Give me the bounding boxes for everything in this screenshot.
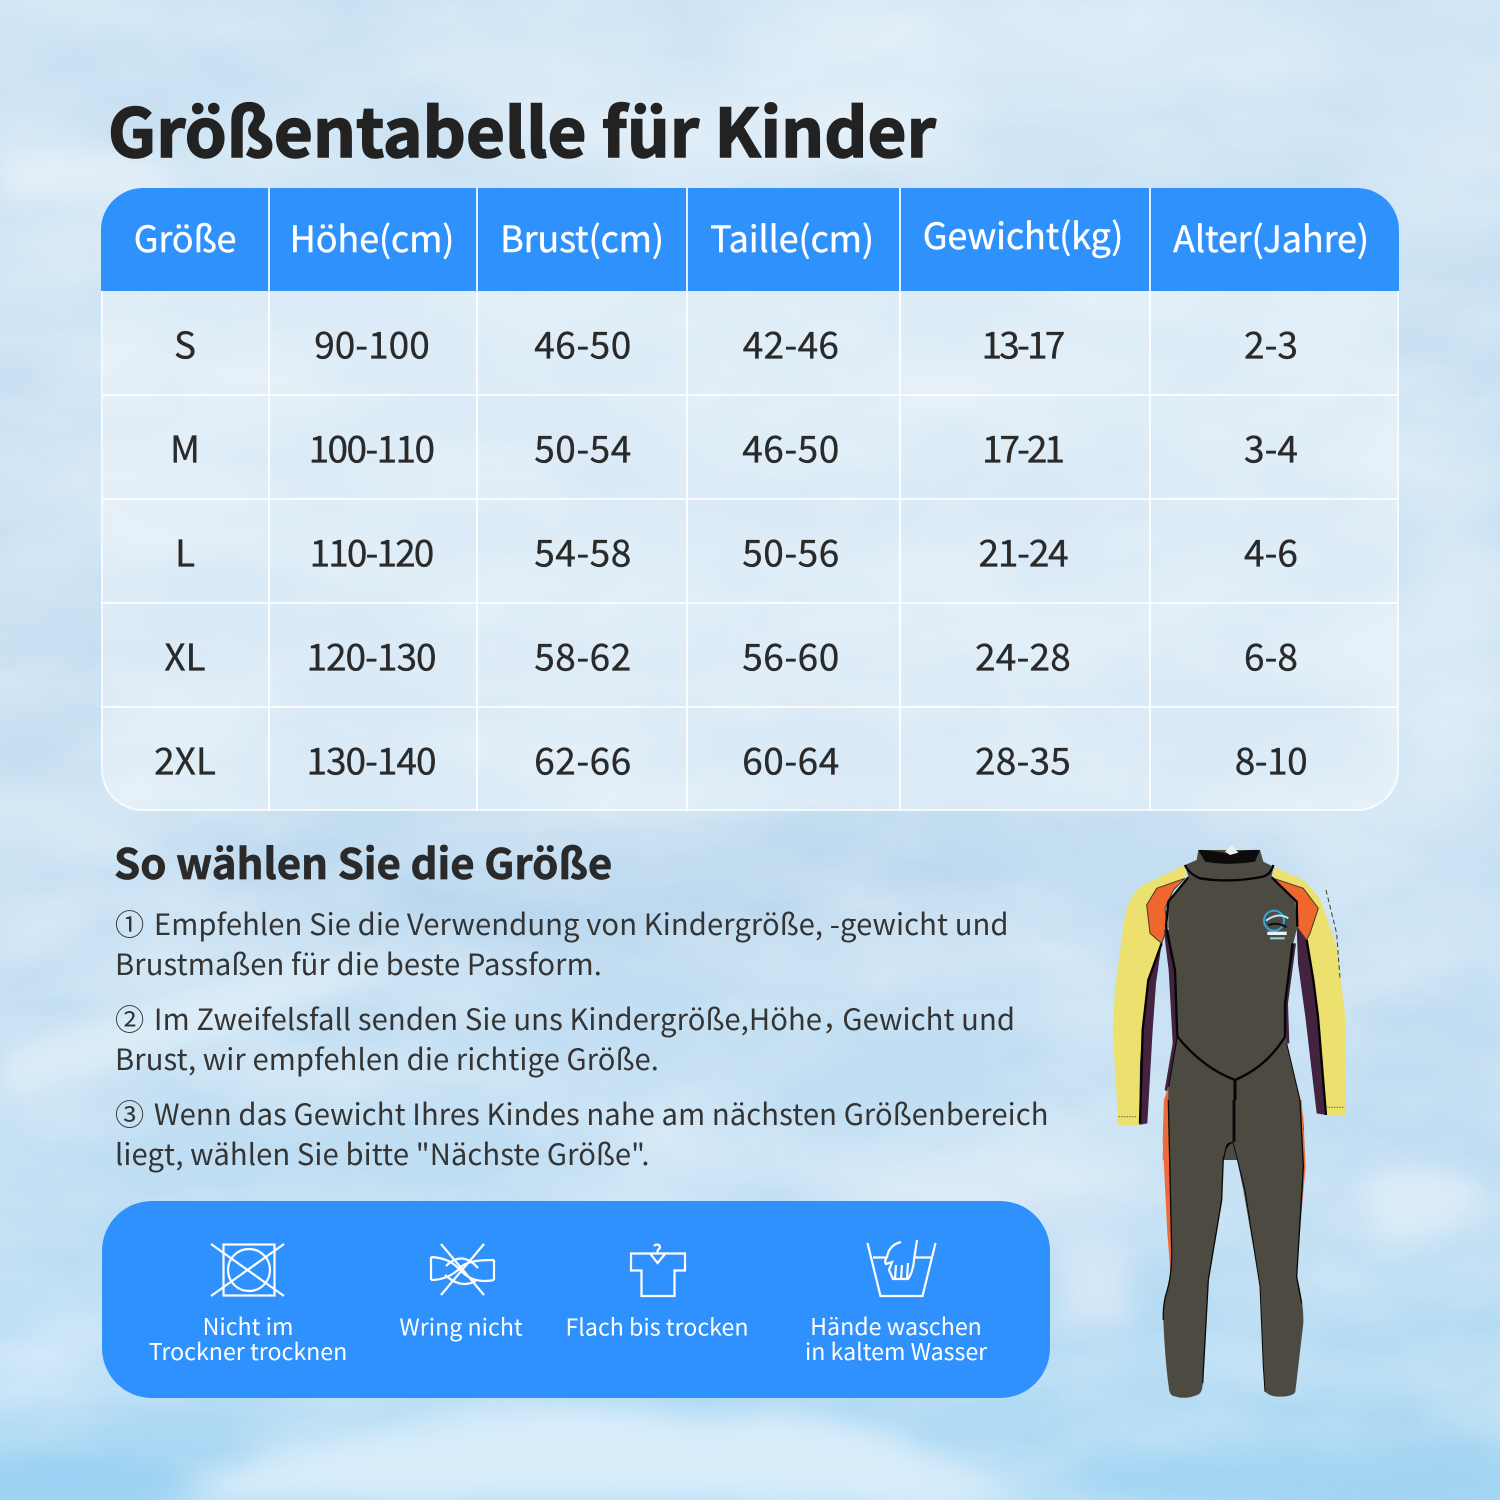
- row XL: 58-62: [534, 628, 632, 682]
- row M: 50-54: [534, 420, 632, 474]
- row L: [175, 524, 1298, 578]
- wetsuit illustration: [1112, 845, 1346, 1398]
- yellow left sleeve: [1113, 865, 1185, 1125]
- legs: [1163, 1100, 1304, 1398]
- collar inside: [1198, 850, 1260, 864]
- label: hand wash cold: Hände waschen: [810, 1308, 982, 1342]
- label: hand wash cold: [805, 1308, 988, 1367]
- table header row: [101, 188, 1399, 291]
- tip 1: Brustmaßen für die beste Passform.: [115, 942, 602, 984]
- table header row: Größe: [134, 211, 236, 263]
- tip 2: Brust, wir empfehlen die richtige Größe.: [115, 1037, 659, 1079]
- tip 1: [115, 902, 1009, 984]
- label: do not tumble dry: Nicht im: [203, 1308, 293, 1342]
- icon: hand wash tub: [866, 1240, 936, 1298]
- yellow right sleeve: [1273, 867, 1346, 1115]
- table header row: Brust(cm): [500, 211, 664, 263]
- row L: 54-58: [534, 524, 632, 578]
- suit upper: sleeves, torso, seams: [1113, 845, 1346, 1160]
- row 2XL: 62-66: [534, 732, 632, 786]
- label: do not tumble dry: Trockner trocknen: [149, 1333, 347, 1367]
- row S: 46-50: [534, 316, 632, 370]
- row M: 100-110: [309, 420, 433, 474]
- label: dry flat: Flach bis trocken: [566, 1308, 748, 1342]
- row S: S: [174, 316, 196, 370]
- orange shoulder panels: [1147, 878, 1318, 943]
- sleeve purple panels: [1138, 927, 1326, 1125]
- seams: [1140, 865, 1326, 1160]
- row XL: 24-28: [975, 628, 1071, 682]
- heading: how to choose size: So wählen Sie die Größe: [114, 831, 612, 892]
- label: do not tumble dry: [149, 1308, 347, 1367]
- table header row: Höhe(cm): [290, 211, 454, 263]
- row M: 46-50: [742, 420, 840, 474]
- icon: do not wring: [430, 1243, 496, 1296]
- torso side stripes: [1163, 930, 1305, 1160]
- row M: [170, 420, 1298, 474]
- row L: 21-24: [979, 524, 1067, 578]
- row 2XL: 28-35: [975, 732, 1071, 786]
- table header row: Taille(cm): [710, 211, 874, 263]
- row L: 110-120: [310, 524, 432, 578]
- row M: 17-21: [982, 420, 1062, 474]
- row S: 13-17: [982, 316, 1062, 370]
- row M: M: [170, 420, 200, 474]
- row XL: 120-130: [306, 628, 436, 682]
- row L: L: [175, 524, 195, 578]
- label: hand wash cold: in kaltem Wasser: [805, 1333, 987, 1367]
- torso body: [1167, 850, 1303, 1160]
- row L: 4-6: [1244, 524, 1298, 578]
- row S: 2-3: [1244, 316, 1298, 370]
- row XL: 6-8: [1244, 628, 1298, 682]
- cuff and sleeve stitching: [1118, 890, 1345, 1117]
- row XL: [164, 628, 1298, 682]
- row M: 3-4: [1244, 420, 1298, 474]
- row 2XL: 8-10: [1235, 732, 1307, 786]
- icon: do not tumble dry: [210, 1243, 285, 1297]
- row 2XL: [154, 732, 1307, 786]
- size table: [101, 188, 1399, 811]
- tip 2: ② Im Zweifelsfall senden Sie uns Kindergröße,Höhe，Gewicht und: [115, 997, 1015, 1039]
- row 2XL: 130-140: [306, 732, 436, 786]
- table header row: Alter(Jahre): [1173, 211, 1369, 263]
- tip 1: ① Empfehlen Sie die Verwendung von Kindergröße, -gewicht und: [115, 902, 1009, 944]
- icon: dry flat shirt: [630, 1244, 686, 1298]
- leg orange stripes: [1163, 1100, 1306, 1287]
- label: do not wring: Wring nicht: [399, 1308, 523, 1342]
- chest logo: [1264, 911, 1288, 939]
- row XL: 56-60: [742, 628, 840, 682]
- row S: 42-46: [743, 316, 839, 370]
- row 2XL: 2XL: [154, 732, 216, 786]
- tip 3: [115, 1092, 1049, 1174]
- row XL: XL: [164, 628, 206, 682]
- zipper tag: [1225, 845, 1238, 855]
- title: Größentabelle für Kinder: [108, 80, 936, 177]
- leg seams: [1163, 1100, 1303, 1392]
- panel: care instructions: [102, 1201, 1050, 1398]
- row S: [174, 316, 1298, 370]
- row L: 50-56: [742, 524, 840, 578]
- row S: 90-100: [314, 316, 430, 370]
- tip 3: liegt, wählen Sie bitte "Nächste Größe".: [115, 1132, 650, 1174]
- tip 3: ③ Wenn das Gewicht Ihres Kindes nahe am nächsten Größenbereich: [115, 1092, 1049, 1134]
- suit legs: [1163, 1100, 1306, 1398]
- tip 2: [115, 997, 1015, 1079]
- row 2XL: 60-64: [742, 732, 840, 786]
- table header row: Gewicht(kg): [923, 208, 1123, 260]
